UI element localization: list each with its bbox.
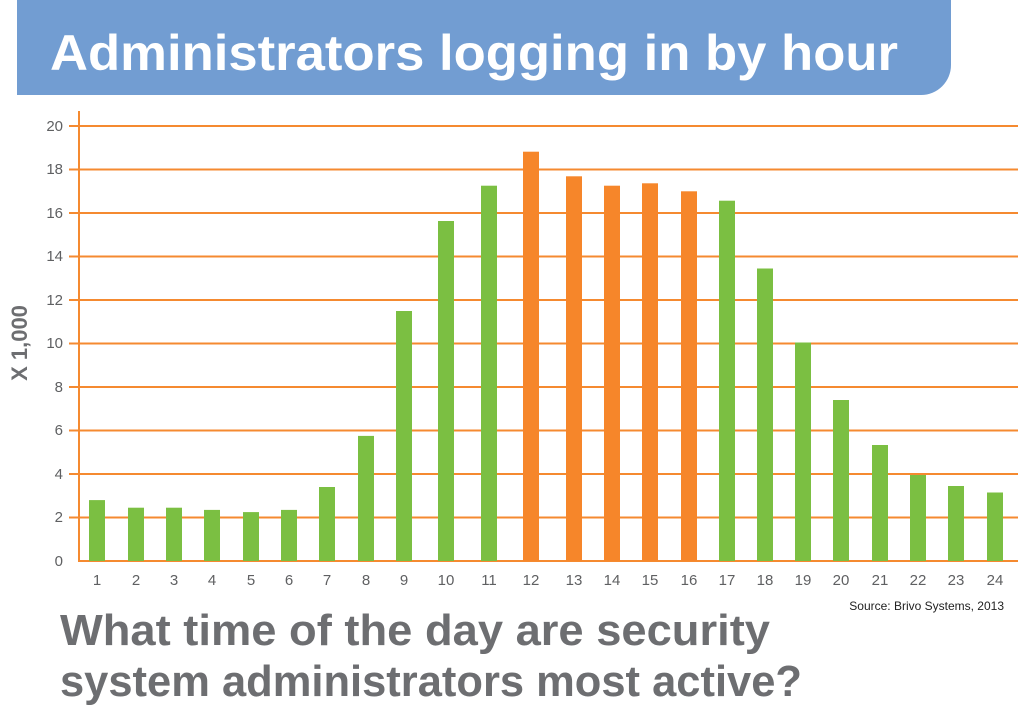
x axis labels: 1 — [93, 572, 101, 589]
y axis labels: 14 — [46, 248, 63, 265]
y axis labels: 0 — [55, 553, 63, 570]
x axis labels: 21 — [872, 572, 888, 589]
bars — [89, 152, 1003, 561]
y axis labels: 16 — [46, 205, 63, 222]
y axis labels: 10 — [46, 335, 63, 352]
y axis labels: 4 — [55, 466, 63, 483]
x axis labels: 8 — [362, 572, 370, 589]
y axis labels: 12 — [46, 292, 63, 309]
x axis labels: 7 — [323, 572, 331, 589]
x axis labels: 11 — [481, 572, 497, 589]
x axis labels: 17 — [719, 572, 735, 589]
question text — [60, 606, 802, 706]
y axis labels — [46, 118, 63, 570]
x axis labels: 19 — [795, 572, 811, 589]
y axis labels: 18 — [46, 161, 63, 178]
y axis labels: 6 — [55, 422, 63, 439]
source note: Source: Brivo Systems, 2013 — [849, 599, 1004, 613]
x axis labels: 18 — [757, 572, 773, 589]
question text: What time of the day are security — [60, 606, 771, 655]
title banner: Administrators logging in by hour — [50, 25, 898, 81]
bar chart — [7, 111, 1018, 589]
y axis labels: 8 — [55, 379, 63, 396]
x axis labels: 20 — [833, 572, 849, 589]
x axis labels: 14 — [604, 572, 620, 589]
x axis labels: 5 — [247, 572, 255, 589]
y axis title: X 1,000 — [7, 305, 32, 381]
x axis labels: 12 — [523, 572, 539, 589]
x axis labels: 16 — [681, 572, 697, 589]
x axis labels: 2 — [132, 572, 140, 589]
x axis labels: 9 — [400, 572, 408, 589]
x axis labels — [93, 572, 1003, 589]
x axis labels: 22 — [910, 572, 926, 589]
x axis labels: 4 — [208, 572, 216, 589]
y axis labels: 2 — [55, 509, 63, 526]
y axis labels: 20 — [46, 118, 63, 135]
x axis labels: 10 — [438, 572, 454, 589]
x axis labels: 15 — [642, 572, 658, 589]
x axis labels: 13 — [566, 572, 582, 589]
x axis labels: 23 — [948, 572, 964, 589]
x axis labels: 3 — [170, 572, 178, 589]
title banner — [17, 0, 951, 95]
x axis labels: 24 — [987, 572, 1003, 589]
x axis labels: 6 — [285, 572, 293, 589]
question text: system administrators most active? — [60, 657, 802, 706]
